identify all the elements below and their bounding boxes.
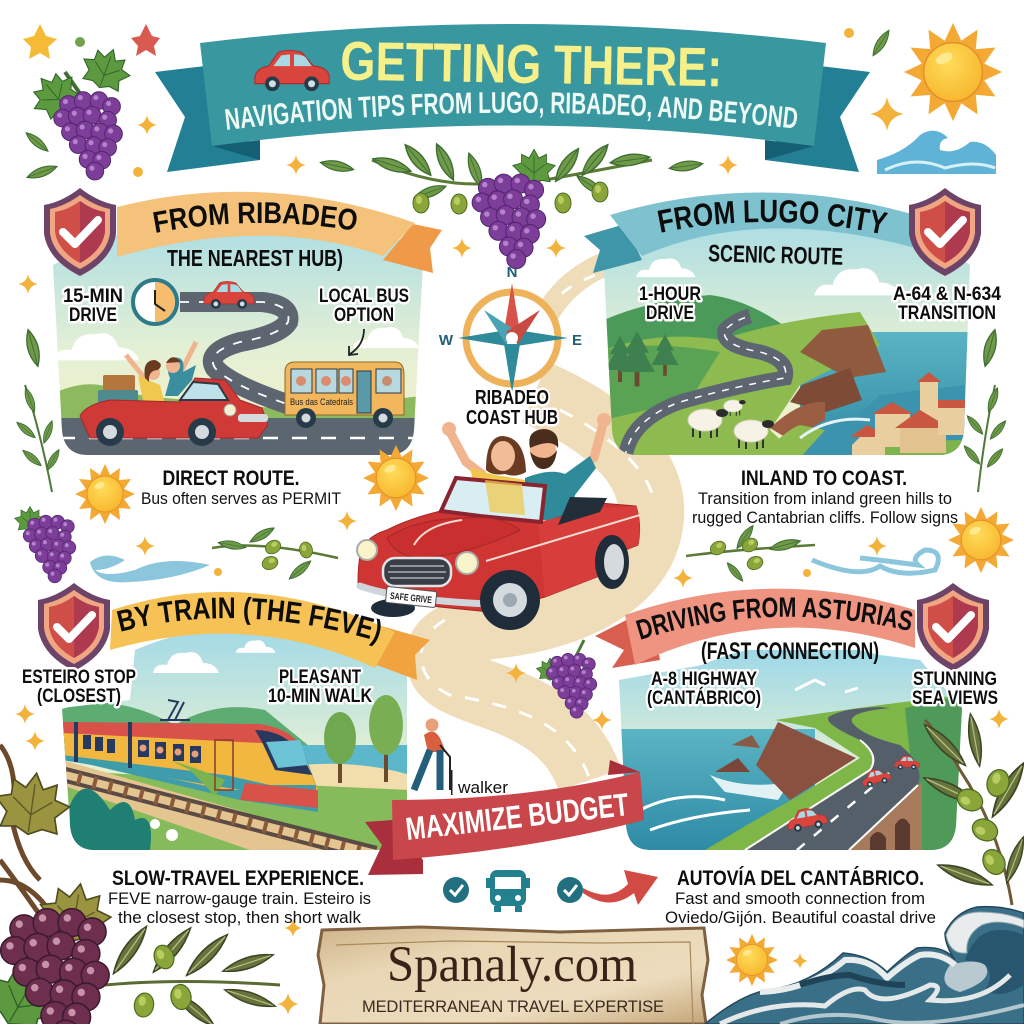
callout: local bus option: LOCAL BUS <box>319 286 409 307</box>
suns beside panels <box>75 445 1014 573</box>
panel scene <box>58 620 415 852</box>
caption: slow travel: SLOW-TRAVEL EXPERIENCE. <box>112 867 364 890</box>
caption: slow travel <box>108 867 371 927</box>
red convertible <box>80 378 268 446</box>
ribbon: maximize budget: MAXIMIZE BUDGET <box>404 786 631 847</box>
callout: 15-min drive: 15-MIN <box>63 286 123 307</box>
callout: A-64 and N-634 transition <box>893 284 1001 324</box>
grape cluster top left <box>22 41 136 180</box>
panel: from Ribadeo <box>44 188 442 508</box>
callout: A-8 highway: A-8 HIGHWAY <box>651 669 757 690</box>
banner: driving from Asturias: (FAST CONNECTION) <box>701 638 879 665</box>
luggage <box>98 375 138 408</box>
caption: Autovía del Cantábrico: AUTOVÍA DEL CANTÁBRICO. <box>677 867 924 890</box>
check icon <box>443 877 469 903</box>
banner: by train: BY TRAIN (THE FEVE) <box>116 596 381 646</box>
car body <box>358 503 640 612</box>
waving couple <box>126 342 196 405</box>
callout: pleasant walk: PLEASANT <box>279 667 361 688</box>
label: Ribadeo coast hub: COAST HUB <box>466 407 558 429</box>
panel: by train <box>22 583 430 927</box>
yellow bus <box>285 362 404 428</box>
ribbon tails <box>155 66 870 172</box>
callout: 1-hour drive: 1-HOUR <box>639 284 701 305</box>
icon: shield check <box>917 583 989 671</box>
caption: direct route <box>141 467 341 508</box>
label: Ribadeo coast hub <box>466 387 558 429</box>
compass: E <box>572 332 582 349</box>
sun, sparkle and wave top right <box>844 23 1002 174</box>
walker: walker <box>457 778 508 797</box>
callout: Esteiro stop: ESTEIRO STOP <box>22 667 136 688</box>
callout: stunning sea views: SEA VIEWS <box>912 688 998 709</box>
callout: pleasant walk: 10-MIN WALK <box>268 686 372 707</box>
panel scene <box>615 650 965 853</box>
icon: small red car <box>204 281 254 309</box>
arrow <box>583 870 658 905</box>
callout: 1-hour drive <box>639 284 701 324</box>
decorative row left of car <box>15 506 338 583</box>
banner: From Ribadeo <box>117 192 442 273</box>
yellow bus: Bus das Catedrals <box>290 397 353 407</box>
footer plaque: Spanaly.com <box>387 937 637 993</box>
caption: slow travel: the closest stop, then short walk <box>118 908 361 927</box>
caption: Autovía del Cantábrico: Fast and smooth connection from <box>675 889 925 908</box>
caption: inland to coast <box>692 467 958 527</box>
bottom-left vine, grapes and olive branch <box>0 704 302 1024</box>
footer plaque <box>318 927 708 1024</box>
caption: inland to coast: Transition from inland green hills to <box>698 489 952 508</box>
callout: A-8 highway: (CANTÁBRICO) <box>647 687 761 709</box>
banner: driving from Asturias <box>595 588 915 668</box>
side laurel sprigs <box>15 274 1008 492</box>
banner: From Lugo City <box>584 192 914 273</box>
callout: local bus option: OPTION <box>334 305 394 326</box>
icon: shield check <box>38 583 110 671</box>
panel scene <box>53 235 422 455</box>
banner: driving from Asturias: DRIVING FROM ASTURIAS <box>636 598 912 640</box>
banner: by train <box>110 592 430 680</box>
callout: Esteiro stop: (CLOSEST) <box>37 686 121 707</box>
callout: 1-hour drive: DRIVE <box>646 303 694 324</box>
caption: inland to coast: INLAND TO COAST. <box>741 467 907 490</box>
callout: Esteiro stop <box>22 667 136 707</box>
winding central road <box>421 255 655 780</box>
callout: stunning sea views: STUNNING <box>913 669 997 690</box>
small grapes by road <box>506 640 612 730</box>
caption: Autovía del Cantábrico: Oviedo/Gijón. Beautiful coastal drive <box>665 908 936 927</box>
big wave bottom right <box>705 907 1024 1024</box>
callout: A-64 and N-634 transition: TRANSITION <box>898 303 996 324</box>
bottom sun <box>726 934 808 986</box>
callout: 15-min drive <box>63 286 123 326</box>
banner: From Ribadeo: FROM RIBADEO <box>153 202 357 233</box>
caption: Autovía del Cantábrico <box>665 867 936 927</box>
olive and grape garland top centre <box>286 141 738 269</box>
decorative row right of car <box>673 523 938 588</box>
subtitle text <box>226 113 798 130</box>
callout: A-64 and N-634 transition: A-64 & N-634 <box>893 284 1001 305</box>
title banner: NAVIGATION TIPS FROM LUGO, RIBADEO, AND BEYOND <box>225 92 798 130</box>
decorative stars and dots, top left <box>23 24 160 182</box>
caption: direct route: Bus often serves as PERMIT <box>141 489 341 508</box>
number plate: SAFE GRIVE <box>389 591 432 606</box>
big red car with couple <box>357 413 640 630</box>
number plate <box>385 586 437 608</box>
title text: GETTING THERE: <box>340 30 723 98</box>
icon: red car <box>255 50 329 91</box>
caption: direct route: DIRECT ROUTE. <box>162 467 300 490</box>
compass: N <box>507 264 517 281</box>
banner: From Ribadeo: THE NEAREST HUB) <box>167 245 343 271</box>
caption: inland to coast: rugged Cantabrian cliffs. Follow signs <box>692 508 958 527</box>
right olive branch <box>921 709 1024 905</box>
banner: From Lugo City: FROM LUGO CITY <box>658 200 888 234</box>
compass <box>439 264 582 393</box>
callout: local bus option <box>319 286 409 326</box>
icons: check, bus, check, arrow <box>443 870 658 912</box>
callout: stunning sea views <box>912 669 998 709</box>
panel scene <box>604 228 970 455</box>
walker <box>414 718 508 797</box>
label: Ribadeo coast hub: RIBADEO <box>475 387 549 409</box>
arrow to bus <box>349 329 364 355</box>
panel: from Lugo city <box>584 188 1001 527</box>
callout: A-8 highway <box>647 669 761 709</box>
footer plaque: MEDITERRANEAN TRAVEL EXPERTISE <box>362 998 664 1016</box>
caption: slow travel: FEVE narrow-gauge train. Esteiro is <box>108 889 371 908</box>
icon: shield check <box>44 188 116 276</box>
icon: shield check <box>909 188 981 276</box>
title banner <box>155 24 870 172</box>
icon: clock <box>133 280 177 324</box>
check icon <box>557 877 583 903</box>
compass: W <box>439 332 454 349</box>
bus icon <box>486 870 530 912</box>
ribbon: maximize budget <box>365 760 644 875</box>
ribbon main <box>200 24 826 146</box>
couple <box>442 413 611 520</box>
callout: 15-min drive: DRIVE <box>69 305 117 326</box>
callout: pleasant walk <box>268 667 372 707</box>
banner: From Lugo City: SCENIC ROUTE <box>708 240 844 271</box>
panel: driving from Asturias <box>595 583 998 927</box>
train <box>62 722 318 812</box>
